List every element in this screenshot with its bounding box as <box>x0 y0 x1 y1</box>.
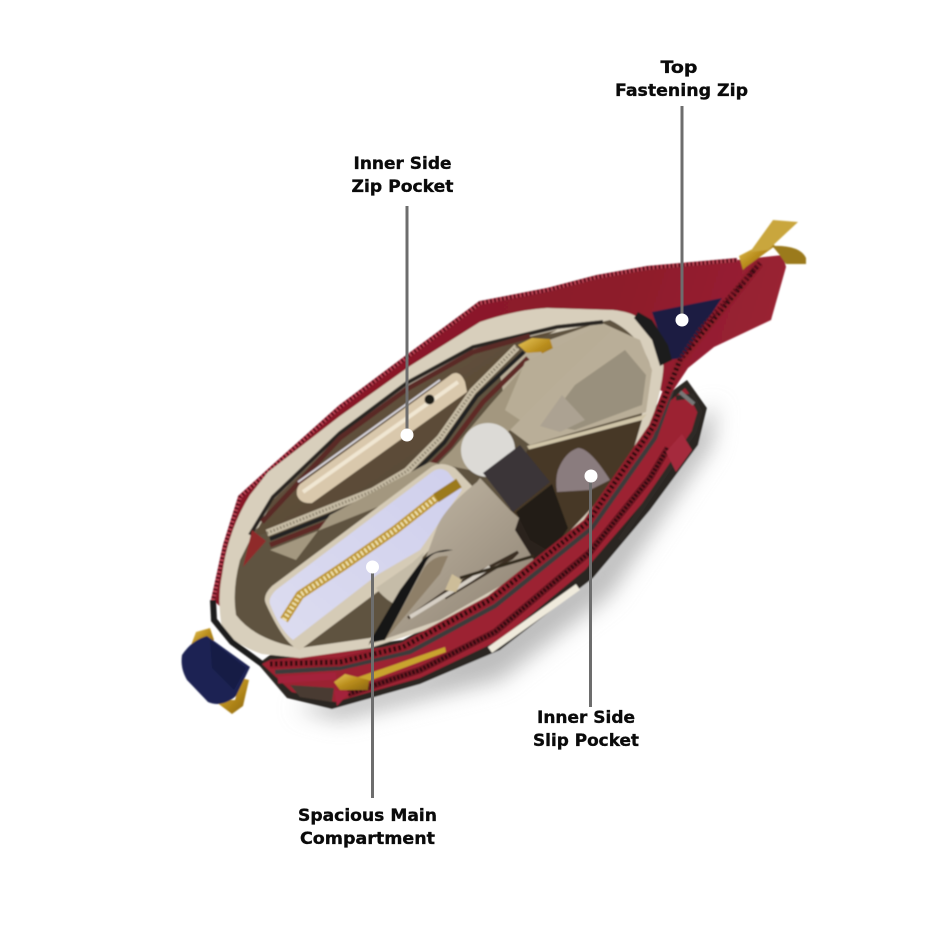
top zip teeth <box>213 260 737 600</box>
second zipper <box>348 448 668 694</box>
maroon wedge <box>243 530 266 567</box>
front zipper over interior <box>270 263 760 664</box>
tan fabric under pocket <box>270 362 552 560</box>
label: inner side zip pocket: Zip Pocket <box>352 177 454 197</box>
label: inner side slip pocket: Slip Pocket <box>533 731 639 751</box>
label: inner side zip pocket: Inner Side <box>354 154 452 174</box>
leader: inner side slip pocket <box>584 470 598 707</box>
gold zip pull <box>518 338 555 363</box>
pocket zipper tape <box>267 347 517 533</box>
label: top fastening zip: Top <box>660 58 698 78</box>
label: top fastening zip: Fastening Zip <box>615 81 748 101</box>
white compact <box>461 423 515 477</box>
front outer pocket body <box>258 380 707 709</box>
inner side slip pocket <box>368 414 647 645</box>
back flap with top zipper <box>213 255 786 620</box>
label: spacious main compartment: Compartment <box>300 829 435 849</box>
leader: inner side zip pocket <box>400 206 414 442</box>
inner side zip pocket <box>254 330 557 545</box>
cream lining <box>220 308 663 658</box>
sunglasses and frame <box>369 550 534 643</box>
gold top zipper pull <box>739 220 806 270</box>
purse with gold zipper <box>265 464 472 650</box>
lower left pocket gap <box>290 685 334 702</box>
label: spacious main compartment <box>298 806 437 849</box>
label: top fastening zip <box>615 58 748 101</box>
phone <box>297 373 467 503</box>
right compartment <box>510 420 642 550</box>
shoulder strap with gold buckle <box>182 628 250 714</box>
divider strip <box>527 414 647 451</box>
black pocket edge right <box>620 396 700 540</box>
leader: main compartment <box>366 560 379 798</box>
back interior panel <box>500 322 652 445</box>
black connector at strap <box>213 600 262 664</box>
bag <box>182 220 806 720</box>
label: spacious main compartment: Spacious Main <box>298 806 437 826</box>
inner navy lining of flap <box>634 298 722 366</box>
upper lining inner black piping <box>250 322 603 535</box>
label: inner side slip pocket: Inner Side <box>537 708 635 728</box>
mirror pick <box>556 448 610 492</box>
label: inner side slip pocket <box>533 708 639 751</box>
gold pocket zip pull <box>334 647 446 690</box>
drop shadow <box>295 405 716 720</box>
interior floor <box>235 320 650 648</box>
cream strip under pocket <box>490 587 578 650</box>
label: inner side zip pocket <box>352 154 454 197</box>
leader: top fastening zip <box>676 106 688 326</box>
beige leather flap <box>376 552 424 606</box>
dark stripe along main zipper <box>275 390 672 672</box>
black lipstick <box>483 445 568 553</box>
grab tab <box>666 434 692 472</box>
